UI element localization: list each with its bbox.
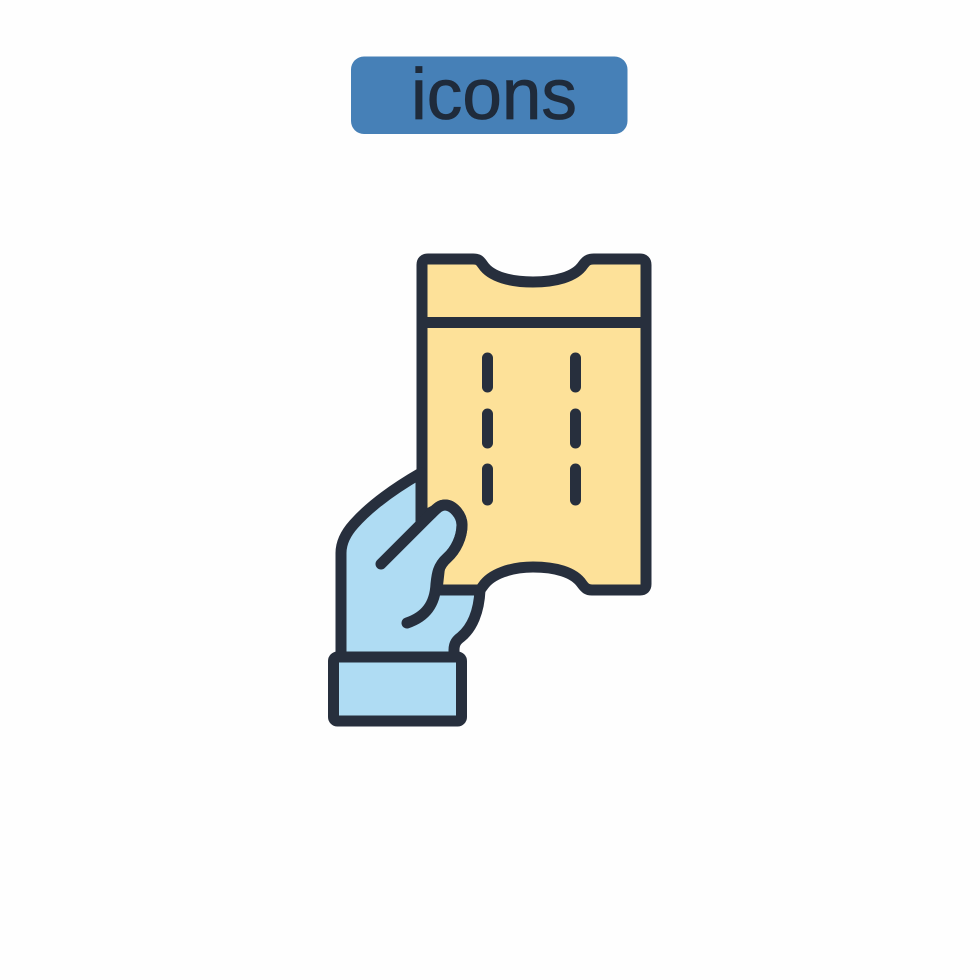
ticket [422,259,646,590]
badge: icons label [351,55,628,135]
heading: icons: icons [411,55,577,135]
ticket tear line [422,317,646,328]
finger line [437,584,480,596]
dashed perforation left [482,358,493,500]
thumb line [381,505,462,623]
dashed perforation right [570,358,581,500]
icon: hand holding ticket [334,259,646,721]
cuff [334,657,462,721]
hand [341,473,480,657]
